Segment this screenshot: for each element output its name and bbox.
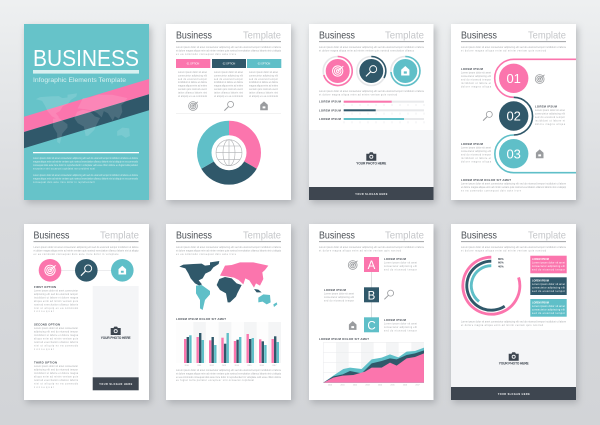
step C text: consectetur adipiscing elit — [384, 326, 417, 329]
second option text: nisi ut aliquip ex ea commodo — [34, 344, 79, 348]
step 03 text: incididunt ut labore et — [461, 157, 491, 160]
option column text: sed do eiusmod tempor — [214, 78, 243, 81]
icon circle: home — [111, 259, 134, 282]
pink diagonal stripe — [24, 79, 149, 132]
second option text: incididunt ut labore et dolore magna — [34, 334, 79, 337]
pink info box: LOREM IPSUM — [532, 258, 549, 261]
third option text: nisi ut aliquip ex ea commodo — [34, 382, 79, 386]
first option text: nisi ut aliquip ex ea commodo — [34, 307, 79, 310]
step 01 text: consectetur adipiscing elit — [461, 75, 491, 78]
donut chart — [197, 121, 261, 185]
intro text: Lorem ipsum dolor sit amet consectetur adipiscing elit sed do eiusmod tempor incididunt ut labore — [176, 46, 282, 49]
option tabs — [176, 59, 281, 68]
bar chart: 2013 — [222, 365, 226, 367]
option tabs: 03 OPTION — [258, 62, 271, 65]
option column text: ut aliquip ex ea commodo — [214, 95, 244, 98]
pink info box: consectetur adipiscing elit — [532, 265, 565, 268]
body text: et dolore magna aliqua enim ad minim veniam quis nostrud — [461, 324, 544, 327]
body text: ex ea commodo consequat duis aute irure dolor in reprehenderit in voluptate velit esse cillum dolore — [176, 376, 282, 379]
body text: Lorem ipsum dolor sit amet consectetur adipiscing elit sed do eiusmod tempor incididunt ut labore — [319, 90, 425, 93]
panel: ABC steps and area chart page — [309, 224, 434, 400]
cover body text: consequat duis aute irure dolor in reprehenderit in voluptate velit esse cillum dolore eu fugiat nulla pariatur — [33, 164, 138, 167]
option column text: sed do eiusmod tempor — [178, 78, 207, 81]
first option text: nostrud exercitation ullamco laboris — [34, 304, 79, 306]
option column text: veniam quis nostrud exerci — [178, 88, 207, 91]
step A — [364, 257, 379, 272]
step B: B — [368, 290, 376, 302]
step B text: Lorem ipsum dolor sit amet — [324, 292, 354, 296]
first option text: incididunt ut labore et dolore magna — [34, 296, 79, 300]
step 03 text: consectetur adipiscing elit — [461, 150, 491, 153]
body text: eu fugiat nulla pariatur excepteur sint occaecat cupidatat — [176, 379, 254, 382]
radial labels: 80% — [498, 257, 504, 261]
panel: options and donut page — [166, 24, 291, 200]
option column text: tation ullamco laboris nisi — [178, 91, 207, 94]
world map — [179, 261, 277, 310]
intro text: Lorem ipsum dolor sit amet consectetur adipiscing elit sed do eiusmod tempor incididunt ut labore — [319, 246, 425, 249]
horizontal bar chart: LOREM IPSUM — [319, 108, 342, 112]
step icons — [483, 75, 544, 158]
bar chart: 2014 — [235, 365, 239, 367]
third option text: Lorem ipsum dolor sit amet consectetur — [34, 365, 78, 368]
step C text: LOREM IPSUM — [384, 318, 407, 322]
horizontal bar chart — [319, 100, 424, 123]
step B text: sed do eiusmod tempor — [324, 300, 354, 302]
step 01 text: Lorem ipsum dolor sit amet — [461, 72, 491, 74]
photo placeholder: YOUR PHOTO HERE — [499, 362, 529, 366]
bar chart: 2016 — [260, 365, 264, 367]
option column text — [178, 71, 279, 98]
intro text: et dolore magna aliqua enim ad minim veniam quis nostrud — [319, 249, 402, 252]
icon circle: target — [39, 259, 61, 282]
radial labels: 40% — [498, 264, 504, 268]
header: Business — [34, 230, 70, 242]
step 02 text: Lorem ipsum dolor sit amet — [535, 109, 565, 112]
step A text — [384, 257, 417, 272]
area chart: 2013 — [365, 384, 370, 386]
step A text: LOREM IPSUM — [384, 257, 407, 261]
teal info box: consectetur adipiscing elit — [532, 308, 565, 311]
step 03 text: sed do eiusmod tempor — [461, 154, 491, 156]
dark info box — [530, 277, 567, 295]
option column text: Lorem ipsum dolor sit amet — [249, 71, 278, 74]
header: Template — [243, 230, 281, 242]
bar chart: 2011 — [197, 365, 201, 367]
progress ring: pink — [323, 56, 352, 86]
slogan bar — [451, 387, 576, 400]
step B text: LOREM IPSUM — [324, 288, 347, 292]
second option text: consequat — [34, 348, 54, 351]
step 03 text: dolore magna aliqua — [461, 160, 492, 164]
cover body text: Lorem ipsum dolor sit amet consectetur adipiscing elit sed do eiusmod tempor incididunt ut labore et dolore — [33, 157, 139, 160]
step C text — [384, 318, 417, 332]
option column text: tation ullamco laboris nisi — [214, 91, 243, 94]
icon circle: magnifier — [75, 259, 98, 282]
option tabs: 01 OPTION — [187, 62, 200, 65]
photo placeholder: YOUR PHOTO HERE — [101, 336, 131, 340]
intro text — [319, 46, 425, 52]
step A text: sed do eiusmod tempor — [384, 268, 417, 272]
cover body text: Lorem ipsum dolor sit amet consectetur adipiscing elit sed do eiusmod tempor incididunt ut labore et dolore — [33, 174, 139, 177]
step 02: 02 — [506, 109, 521, 124]
icon: globe — [216, 140, 242, 166]
second option text: aliqua enim ad minim veniam quis — [34, 338, 79, 340]
step connector arcs — [495, 59, 576, 173]
step A text: Lorem ipsum dolor sit amet — [384, 262, 417, 264]
slogan box — [93, 377, 139, 390]
panel: cover page — [24, 24, 149, 200]
bar chart: 2015 — [247, 365, 251, 367]
second option text: SECOND OPTION — [34, 322, 60, 326]
header: Business — [319, 30, 355, 42]
body text: Lorem ipsum dolor sit amet consectetur adipiscing elit sed do eiusmod tempor incididunt ut labore — [461, 320, 567, 324]
step 03 text: Lorem ipsum dolor sit amet — [461, 146, 491, 150]
header: Business — [176, 230, 212, 242]
intro text: et dolore magna aliqua enim ad minim veniam quis nostrud exercitation ullamco laboris nisi ut aliquip — [176, 249, 282, 252]
intro text: ex ea commodo consequat duis aute irure — [176, 253, 237, 256]
area chart: 2017 — [415, 384, 420, 386]
area chart: 2011 — [340, 384, 345, 386]
first option text: consequat — [34, 310, 54, 313]
intro text — [176, 46, 282, 56]
step 01 text: sed do eiusmod tempor — [461, 78, 491, 82]
step C — [364, 317, 379, 332]
header: Template — [243, 30, 281, 42]
intro text: Lorem ipsum dolor sit amet consectetur adipiscing elit sed do eiusmod tempor incididunt ut labore — [319, 46, 425, 49]
option column text: Lorem ipsum dolor sit amet — [178, 71, 207, 74]
cover body text: magna aliqua enim ad minim veniam quis nostrud exercitation ullamco laboris nisi ut aliquip ex ea commodo — [33, 178, 139, 180]
chart title: LOREM IPSUM DOLOR SIT AMET — [319, 337, 369, 341]
bar chart: 2012 — [210, 365, 214, 367]
step A: A — [368, 260, 376, 272]
step B text — [324, 288, 354, 302]
body text — [319, 90, 425, 96]
pink info box — [530, 256, 567, 273]
option column text: consectetur adipiscing elit — [214, 74, 243, 77]
option column text: sed do eiusmod tempor — [249, 78, 278, 81]
header — [461, 30, 566, 42]
footer text — [461, 178, 567, 192]
header: Template — [385, 30, 424, 42]
option column text: magna aliqua enim ad minim — [178, 86, 207, 88]
first option text — [34, 285, 79, 313]
photo placeholder: YOUR PHOTO HERE — [356, 162, 386, 166]
slogan bar: YOUR SLOGAN HERE — [355, 193, 388, 196]
intro text: et dolore magna aliqua enim ad minim veniam quis nostrud exercitation ullamco laboris nisi ut aliquip — [176, 49, 282, 52]
footer text: Lorem ipsum dolor sit amet consectetur adipiscing elit sed do eiusmod tempor incididunt ut labore — [461, 182, 567, 186]
option column text: veniam quis nostrud exerci — [214, 88, 243, 91]
bar chart: 2010 — [185, 365, 189, 367]
intro text — [176, 246, 282, 256]
option column text: incididunt ut labore et dolore — [214, 81, 244, 84]
teal info box: sed do eiusmod tempor — [532, 312, 565, 315]
intro text — [319, 246, 425, 252]
header: Template — [528, 30, 566, 42]
teal info box: Lorem ipsum dolor sit amet — [532, 305, 565, 308]
step 03 text — [461, 142, 492, 164]
third option text — [34, 360, 79, 389]
cover subtitle: Infographic Elements Template — [33, 77, 126, 84]
step 03 text: LOREM IPSUM — [461, 142, 484, 146]
dark diagonal stripe — [24, 94, 149, 148]
intro text: Lorem ipsum dolor sit amet consectetur adipiscing elit sed do eiusmod tempor incididunt ut labore — [176, 246, 282, 249]
panel: progress bars page — [309, 24, 434, 200]
first option text: FIRST OPTION — [34, 285, 56, 289]
intro text — [461, 46, 567, 52]
area chart: 2014 — [378, 384, 382, 386]
step 01 text: LOREM IPSUM — [461, 67, 484, 71]
second option text — [34, 322, 79, 351]
slogan bar: YOUR SLOGAN HERE — [498, 393, 530, 396]
body text: et dolore magna aliqua enim ad minim veniam quis nostrud — [319, 94, 398, 96]
step 02 text: consectetur adipiscing elit — [535, 112, 565, 116]
third option text: nostrud exercitation ullamco laboris — [34, 379, 79, 382]
dark info box: Lorem ipsum dolor sit amet — [532, 283, 565, 286]
intro text: ex ea commodo consequat duis aute irure dolor in voluptate — [34, 253, 119, 256]
title rule — [33, 70, 139, 74]
header: Template — [385, 230, 424, 242]
intro text: et dolore magna aliqua enim ad minim veniam quis nostrud — [461, 49, 547, 52]
header: Business — [176, 30, 212, 42]
dark info box: sed do eiusmod tempor — [532, 290, 565, 293]
step 01 text: incididunt ut labore et — [461, 82, 491, 85]
step B — [364, 287, 379, 302]
step 01 text: dolore magna aliqua — [461, 86, 492, 88]
area chart: 2012 — [353, 384, 357, 386]
slogan bar — [309, 187, 434, 200]
step A text: consectetur adipiscing elit — [384, 265, 417, 268]
step 02 — [499, 101, 528, 131]
option column text: incididunt ut labore et dolore — [249, 81, 279, 84]
cover body text — [33, 157, 139, 184]
intro text — [461, 246, 567, 252]
pink info box: sed do eiusmod tempor — [532, 268, 565, 272]
option column text: incididunt ut labore et dolore — [178, 81, 208, 84]
option column text: consectetur adipiscing elit — [178, 74, 207, 77]
panel: numbered steps page — [451, 24, 576, 200]
header: Business — [319, 230, 355, 242]
third option text: incididunt ut labore et dolore magna — [34, 372, 79, 375]
step icons — [348, 261, 394, 330]
slogan box: YOUR SLOGAN HERE — [99, 383, 133, 386]
intro text: ex ea commodo consequat duis aute irure — [176, 53, 237, 56]
chart title: LOREM IPSUM DOLOR SIT AMET — [176, 317, 226, 321]
body text: et dolore magna aliqua enim ad minim veniam quis nostrud exercitation ullamco laboris nisi ut aliquip — [176, 372, 282, 375]
panel: radial chart page — [451, 224, 576, 400]
footer text: et dolore magna aliqua enim ad minim veniam quis nostrud exercitation ullamco laboris nisi ut aliquip — [461, 186, 567, 189]
step 02 text: LOREM IPSUM — [535, 104, 558, 108]
body text — [461, 320, 567, 327]
intro text: et dolore magna aliqua enim ad minim veniam quis nostrud exercitation ullamco laboris nisi ut aliquip — [34, 249, 139, 252]
footer rule — [33, 152, 139, 153]
photo placeholder — [93, 286, 139, 377]
bar chart: 2017 — [272, 365, 276, 367]
progress ring: teal — [391, 56, 420, 86]
radial labels: 60% — [498, 261, 504, 265]
intro text — [34, 246, 139, 256]
area chart: 2016 — [403, 384, 407, 386]
option column text: veniam quis nostrud exerci — [249, 88, 278, 91]
first option text: adipiscing elit sed do eiusmod tempor — [34, 293, 78, 296]
third option text: THIRD OPTION — [34, 360, 57, 364]
header — [34, 230, 139, 242]
teal info box: LOREM IPSUM — [532, 301, 549, 304]
option column text: ut aliquip ex ea commodo — [178, 95, 208, 98]
header: Business — [461, 230, 497, 242]
header: Template — [528, 230, 566, 242]
radial labels — [498, 257, 504, 268]
step 03 — [499, 139, 528, 168]
teal info box — [530, 299, 567, 317]
first option text: Lorem ipsum dolor sit amet consectetur — [34, 290, 78, 292]
pink info box: Lorem ipsum dolor sit amet — [532, 262, 565, 264]
dark info box: LOREM IPSUM — [532, 280, 549, 283]
option tabs: 02 OPTION — [223, 62, 236, 65]
bar chart — [176, 322, 281, 367]
option icons — [189, 101, 268, 111]
step 02 text: incididunt ut labore et — [535, 120, 565, 122]
progress ring: dark — [357, 56, 386, 86]
photo placeholder — [451, 330, 576, 387]
cover body text: excepteur sint occaecat cupidatat non proident sunt — [33, 168, 95, 170]
intro text: Lorem ipsum dolor sit amet consectetur adipiscing elit sed do eiusmod tempor incididunt ut labore — [461, 46, 567, 49]
panel: three options page — [24, 224, 149, 400]
intro text: Lorem ipsum dolor sit amet consectetur adipiscing elit sed do eiusmod tempor incididunt ut labore — [461, 246, 567, 249]
intro text: et dolore magna aliqua enim ad minim veniam quis nostrud exercitation ullamco — [319, 49, 415, 52]
footer text: LOREM IPSUM DOLOR SIT AMET — [461, 178, 511, 182]
cover title: BUSINESS — [33, 45, 139, 71]
first option text: aliqua enim ad minim veniam quis — [34, 301, 79, 303]
horizontal bar chart: LOREM IPSUM — [319, 100, 342, 104]
step 03: 03 — [506, 146, 521, 161]
third option text: aliqua enim ad minim veniam quis — [34, 376, 79, 378]
step 01 text — [461, 67, 492, 88]
header — [176, 230, 281, 242]
header — [461, 230, 566, 242]
third option text: consequat — [34, 386, 54, 389]
option column text: tation ullamco laboris nisi — [249, 91, 278, 94]
area chart: 2010 — [328, 384, 332, 386]
area chart: 2015 — [390, 384, 395, 386]
header — [319, 30, 424, 42]
header — [176, 30, 281, 42]
second option text: nostrud exercitation ullamco laboris — [34, 341, 79, 344]
step C text: sed do eiusmod tempor — [384, 330, 417, 332]
body text: Lorem ipsum dolor sit amet consectetur adipiscing elit sed do eiusmod tempor incididunt ut labore — [176, 369, 282, 372]
header: Business — [461, 30, 497, 42]
step 01: 01 — [506, 71, 521, 86]
area chart — [323, 342, 424, 386]
intro text: Lorem ipsum dolor sit amet consectetur adipiscing elit sed do eiusmod tempor incididunt ut labore — [34, 246, 139, 249]
horizontal bar chart: LOREM IPSUM — [319, 117, 342, 121]
body text — [176, 369, 282, 382]
option column text: Lorem ipsum dolor sit amet — [214, 71, 243, 74]
dark info box: consectetur adipiscing elit — [532, 287, 565, 290]
cover body text: consequat duis aute irure dolor in reprehenderit — [33, 181, 95, 184]
step 02 text: dolore magna aliqua — [535, 123, 566, 126]
option column text: ut aliquip ex ea commodo — [249, 95, 279, 98]
step 02 text: sed do eiusmod tempor — [535, 116, 565, 119]
step 02 text — [535, 104, 566, 126]
photo placeholder — [309, 130, 434, 187]
step B text: consectetur adipiscing elit — [324, 296, 354, 299]
third option text: adipiscing elit sed do eiusmod tempor — [34, 368, 78, 372]
header: Template — [100, 230, 139, 242]
second option text: adipiscing elit sed do eiusmod tempor — [34, 330, 78, 334]
option column text: magna aliqua enim ad minim — [249, 86, 278, 88]
intro text: et dolore magna aliqua enim ad minim veniam quis nostrud — [461, 249, 547, 252]
header — [319, 230, 424, 242]
option column text: consectetur adipiscing elit — [249, 74, 278, 77]
step 01 — [499, 64, 528, 93]
step C text: Lorem ipsum dolor sit amet — [384, 322, 417, 326]
footer text: ex ea commodo consequat duis aute irure — [461, 190, 522, 192]
step C: C — [367, 320, 376, 332]
radial progress chart — [463, 257, 520, 314]
dotted world map — [36, 93, 130, 144]
panel: world map and bars page — [166, 224, 291, 400]
second option text: Lorem ipsum dolor sit amet consectetur — [34, 327, 78, 330]
cover body text: magna aliqua enim ad minim veniam quis nostrud exercitation ullamco laboris nisi ut aliquip ex ea commodo — [33, 160, 139, 164]
option column text: magna aliqua enim ad minim — [214, 86, 243, 88]
